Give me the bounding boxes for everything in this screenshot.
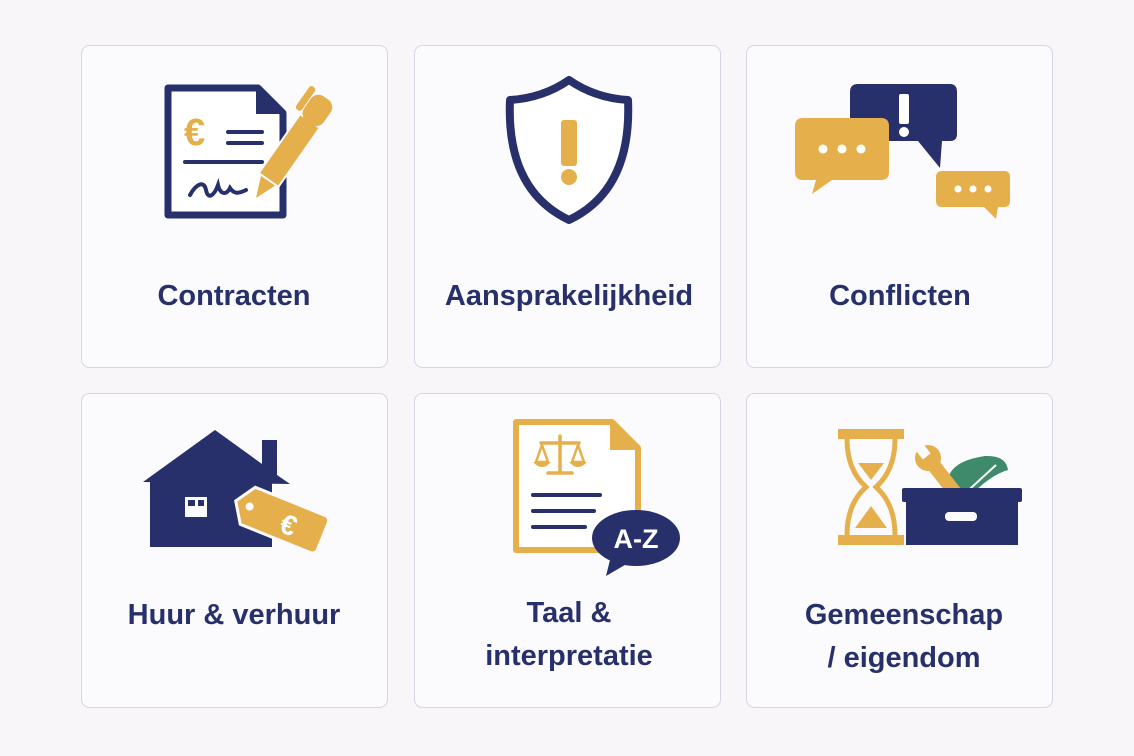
icon: house with price tag (143, 430, 330, 555)
icon: speech bubbles (795, 84, 1010, 219)
label: Taal & interpretatie: Taal & (527, 597, 611, 629)
icon: legal document with A-Z bubble: A-Z (614, 524, 658, 554)
icon: contract with pen (168, 85, 337, 215)
panel: Gemeenschap / eigendom (746, 394, 1052, 708)
label: Contracten: Contracten (157, 280, 311, 312)
panel: Taal & interpretatie: interpretatie (485, 640, 653, 672)
label: Conflicten: Conflicten (829, 280, 971, 312)
panel: Gemeenschap / eigendom: / eigendom (827, 642, 981, 674)
panel: Huur & verhuur (82, 394, 388, 708)
label: Huur & verhuur: Huur & verhuur (128, 599, 340, 631)
panel: Taal & interpretatie (414, 394, 720, 708)
icon: house with price tag: € (276, 508, 302, 542)
label: Aansprakelijkheid: Aansprakelijkheid (445, 280, 693, 312)
icon: hourglass and toolbox (838, 429, 1022, 545)
panel: Aansprakelijkheid (414, 46, 720, 368)
icon: contract with pen: € (184, 112, 205, 154)
icon: shield with exclamation (510, 80, 628, 220)
icon: legal document with A-Z bubble (516, 420, 680, 576)
panel: Conflicten (746, 46, 1052, 368)
label: Gemeenschap / eigendom: Gemeenschap (805, 599, 1003, 631)
panel: Contracten (82, 46, 388, 368)
